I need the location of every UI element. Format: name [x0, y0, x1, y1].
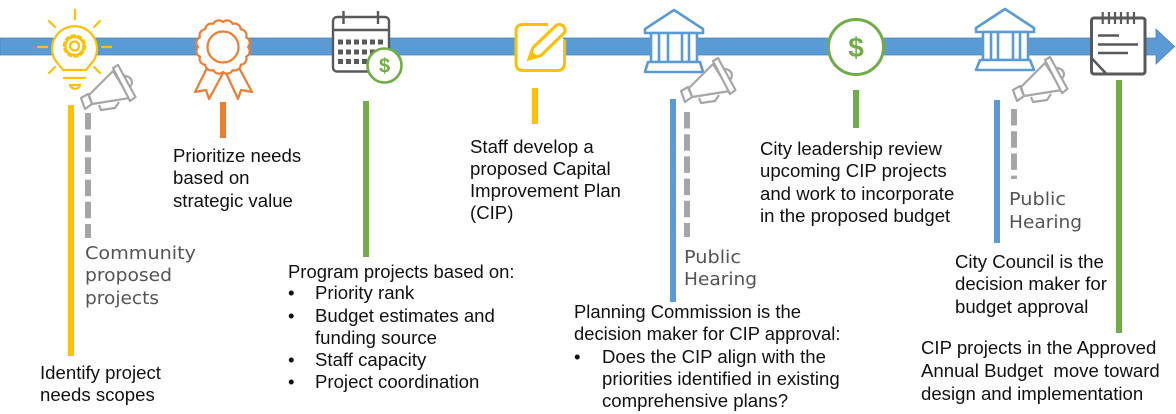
text: prioritize needs: based on — [173, 167, 250, 188]
text: program projects: Priority rank — [315, 282, 415, 303]
icon: megaphone 3 — [1013, 57, 1068, 102]
text: prioritize needs: strategic value — [173, 190, 293, 211]
text: planning commission: • — [574, 346, 581, 367]
text: program projects: funding source — [315, 327, 437, 348]
line: city leadership — [853, 90, 859, 128]
text: public hearing: Hearing — [684, 269, 757, 290]
line: city council — [994, 100, 1000, 243]
text: program projects: Budget estimates and — [315, 305, 495, 326]
text: program projects: • — [288, 371, 295, 392]
line: hearing dashed — [684, 112, 690, 237]
text: city leadership: in the proposed budget — [760, 205, 951, 226]
icon: calendar with dollar — [333, 11, 402, 82]
text: public hearing 2 — [1009, 189, 1082, 233]
icon: megaphone 2 — [681, 58, 736, 103]
text: prioritize needs: Prioritize needs — [173, 145, 301, 166]
icon: calendar with dollar: $ — [379, 56, 390, 78]
text: public hearing: Public — [684, 247, 741, 268]
text: staff develop — [470, 136, 621, 223]
text: staff develop: Staff develop a — [470, 136, 594, 157]
text: planning commission: decision maker for CIP approval: — [574, 323, 840, 344]
text: planning commission — [574, 301, 840, 411]
icon: ribbon award — [195, 20, 252, 99]
icon: dollar circle: $ — [848, 32, 864, 63]
text: staff develop: (CIP) — [470, 202, 513, 223]
text: community: Community — [85, 243, 196, 264]
text: program projects: • — [288, 349, 295, 370]
text: city leadership: upcoming CIP projects — [760, 160, 947, 181]
line: approved — [1116, 80, 1122, 333]
text: city leadership — [760, 138, 954, 226]
text: planning commission: Planning Commission is the — [574, 301, 801, 322]
line: planning commission — [670, 99, 676, 302]
text: city leadership: and work to incorporate — [760, 183, 954, 204]
text: city council: budget approval — [955, 296, 1088, 317]
text: program projects: Staff capacity — [315, 349, 427, 370]
text: proposed: proposed — [85, 265, 172, 286]
text: city council: City Council is the — [955, 251, 1104, 272]
text: projects: projects — [85, 288, 159, 309]
timeline arrow — [0, 29, 1174, 64]
text: city council — [955, 251, 1107, 317]
text: approved budget: CIP projects in the Approved — [921, 337, 1156, 358]
text: planning commission: Does the CIP align with the — [602, 346, 826, 367]
line: community dashed — [85, 113, 91, 238]
line: prioritize — [220, 102, 226, 138]
text: approved budget: Annual Budget move toward — [921, 360, 1160, 381]
icon: megaphone 1 — [81, 65, 136, 110]
text: prioritize needs — [173, 145, 301, 211]
text: planning commission: comprehensive plans? — [602, 390, 788, 411]
text: city council: decision maker for — [955, 273, 1107, 294]
text: program projects: Project coordination — [315, 371, 479, 392]
text: public hearing 2: Hearing — [1009, 212, 1082, 233]
text: public hearing — [684, 247, 757, 290]
text: planning commission: priorities identified in existing — [602, 368, 840, 389]
text: identify project needs: Identify project — [40, 362, 162, 383]
text: approved budget — [921, 337, 1160, 404]
icon: dollar circle — [828, 20, 884, 74]
text: program projects: • — [288, 282, 295, 303]
line: public hearing dashed 2 — [1011, 109, 1017, 179]
text: identify project needs: needs scopes — [40, 384, 155, 405]
text: city leadership: City leadership review — [760, 138, 942, 159]
line: identify — [68, 105, 74, 356]
icon: notepad — [1092, 12, 1145, 74]
line: staff develop — [532, 88, 538, 124]
icon: pencil note — [516, 24, 565, 70]
text: staff develop: proposed Capital — [470, 158, 611, 179]
text: program projects — [288, 261, 514, 392]
text: identify project needs — [40, 362, 162, 405]
text: approved budget: design and implementation — [921, 383, 1143, 404]
text: program projects: • — [288, 305, 295, 326]
text: staff develop: Improvement Plan — [470, 180, 621, 201]
text: program projects: Program projects based on: — [288, 261, 514, 282]
icon: lightbulb with gear — [38, 10, 111, 89]
icon: bank building 1 — [645, 10, 703, 72]
text: public hearing 2: Public — [1009, 189, 1066, 210]
icon: bank building 2 — [976, 9, 1034, 70]
line: program — [363, 101, 369, 257]
